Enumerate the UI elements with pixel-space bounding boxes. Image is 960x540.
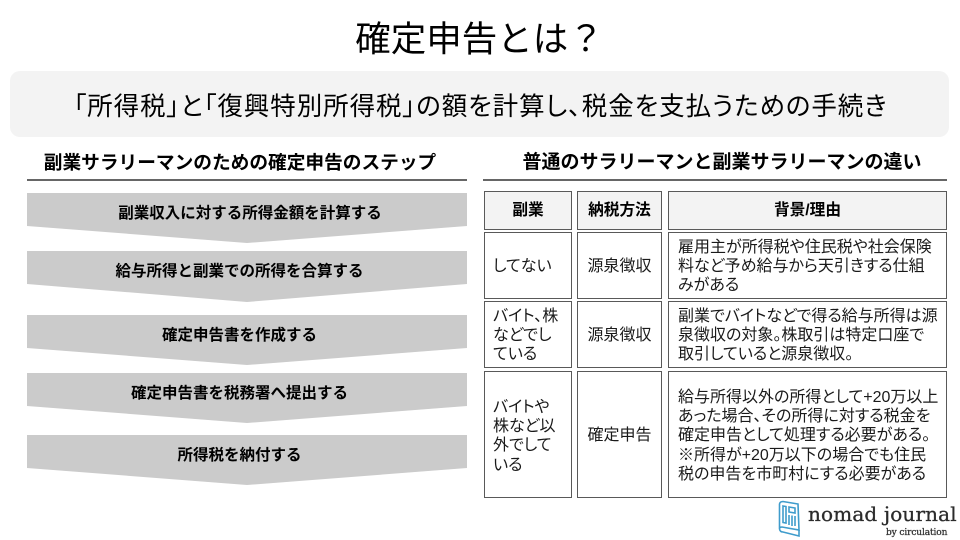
table header: side job: 副業 [512,202,544,219]
step 5 chevron [27,435,467,485]
row 3 reason: 税の申告を市町村にする必要がある [678,466,926,483]
row 2 reason: 泉徴収の対象。株取引は特定口座で [678,327,924,344]
step 2 chevron [27,251,467,302]
row 2 method [577,301,662,368]
step 4 chevron: 確定申告書を税務署へ提出する [131,385,348,402]
table header: background [668,191,947,230]
tagline: by circulation [886,528,947,538]
wordmark: nomad journal [808,502,957,526]
title: 確定申告とは？ [355,19,604,59]
row 3 reason [668,371,947,498]
row 3 reason: ※所得が+20万以下の場合でも住民 [678,447,926,464]
step 5 chevron: 所得税を納付する [177,447,302,464]
row 2 method: 源泉徴収 [587,327,652,344]
row 2 reason [668,301,947,368]
row 2 reason: 副業でバイトなどで得る給与所得は源 [678,308,938,325]
step 1 chevron [27,193,467,243]
table header: payment method [577,191,662,230]
heading: steps: 副業サラリーマンのための確定申告のステップ [44,152,436,173]
step 2 chevron: 給与所得と副業での所得を合算する [115,263,364,280]
row 3 side job: 外でして [493,437,552,454]
row 3 method [577,371,662,498]
row 1 method: 源泉徴収 [587,258,652,275]
row 3 side job [484,371,572,498]
divider right [483,179,947,181]
row 3 side job: バイトや [493,399,550,416]
row 3 method: 確定申告 [587,427,652,444]
row 3 reason: 給与所得以外の所得として+20万以上 [678,389,938,406]
logo: nomad journal [778,500,957,538]
table header: side job [484,191,572,230]
banner: definition of tax return [10,71,949,137]
table header: background: 背景/理由 [774,202,841,219]
step 1 chevron: 副業収入に対する所得金額を計算する [118,205,382,222]
row 1 reason [668,232,947,299]
row 3 reason: 確定申告として処理する必要がある。 [678,427,930,444]
step 3 chevron: 確定申告書を作成する [162,327,317,344]
row 2 side job: ている [493,346,537,363]
row 1 reason: 料など予め給与から天引きする仕組 [678,258,925,275]
step 4 chevron [27,373,467,423]
row 3 side job: 株など以 [493,418,556,435]
row 1 side job: してない [493,258,552,275]
table header: payment method: 納税方法 [588,202,651,219]
row 3 reason: あった場合、その所得に対する税金を [678,408,930,425]
divider left [27,179,467,181]
row 1 method [577,232,662,299]
row 1 reason: 雇用主が所得税や住民税や社会保険 [678,239,932,256]
row 1 reason: みがある [678,277,739,294]
row 2 side job [484,301,572,368]
row 3 side job: いる [493,457,522,474]
row 2 side job: バイト、株 [493,308,558,325]
row 1 side job [484,232,572,299]
icon: book [778,500,800,537]
step 3 chevron [27,315,467,365]
banner text: 「所得税」と「復興特別所得税」の額を計算し、税金を支払うための手続き [73,93,888,121]
row 2 reason: 取引していると源泉徴収。 [678,346,853,363]
row 2 side job: などでし [493,327,552,344]
heading: comparison: 普通のサラリーマンと副業サラリーマンの違い [522,152,922,173]
